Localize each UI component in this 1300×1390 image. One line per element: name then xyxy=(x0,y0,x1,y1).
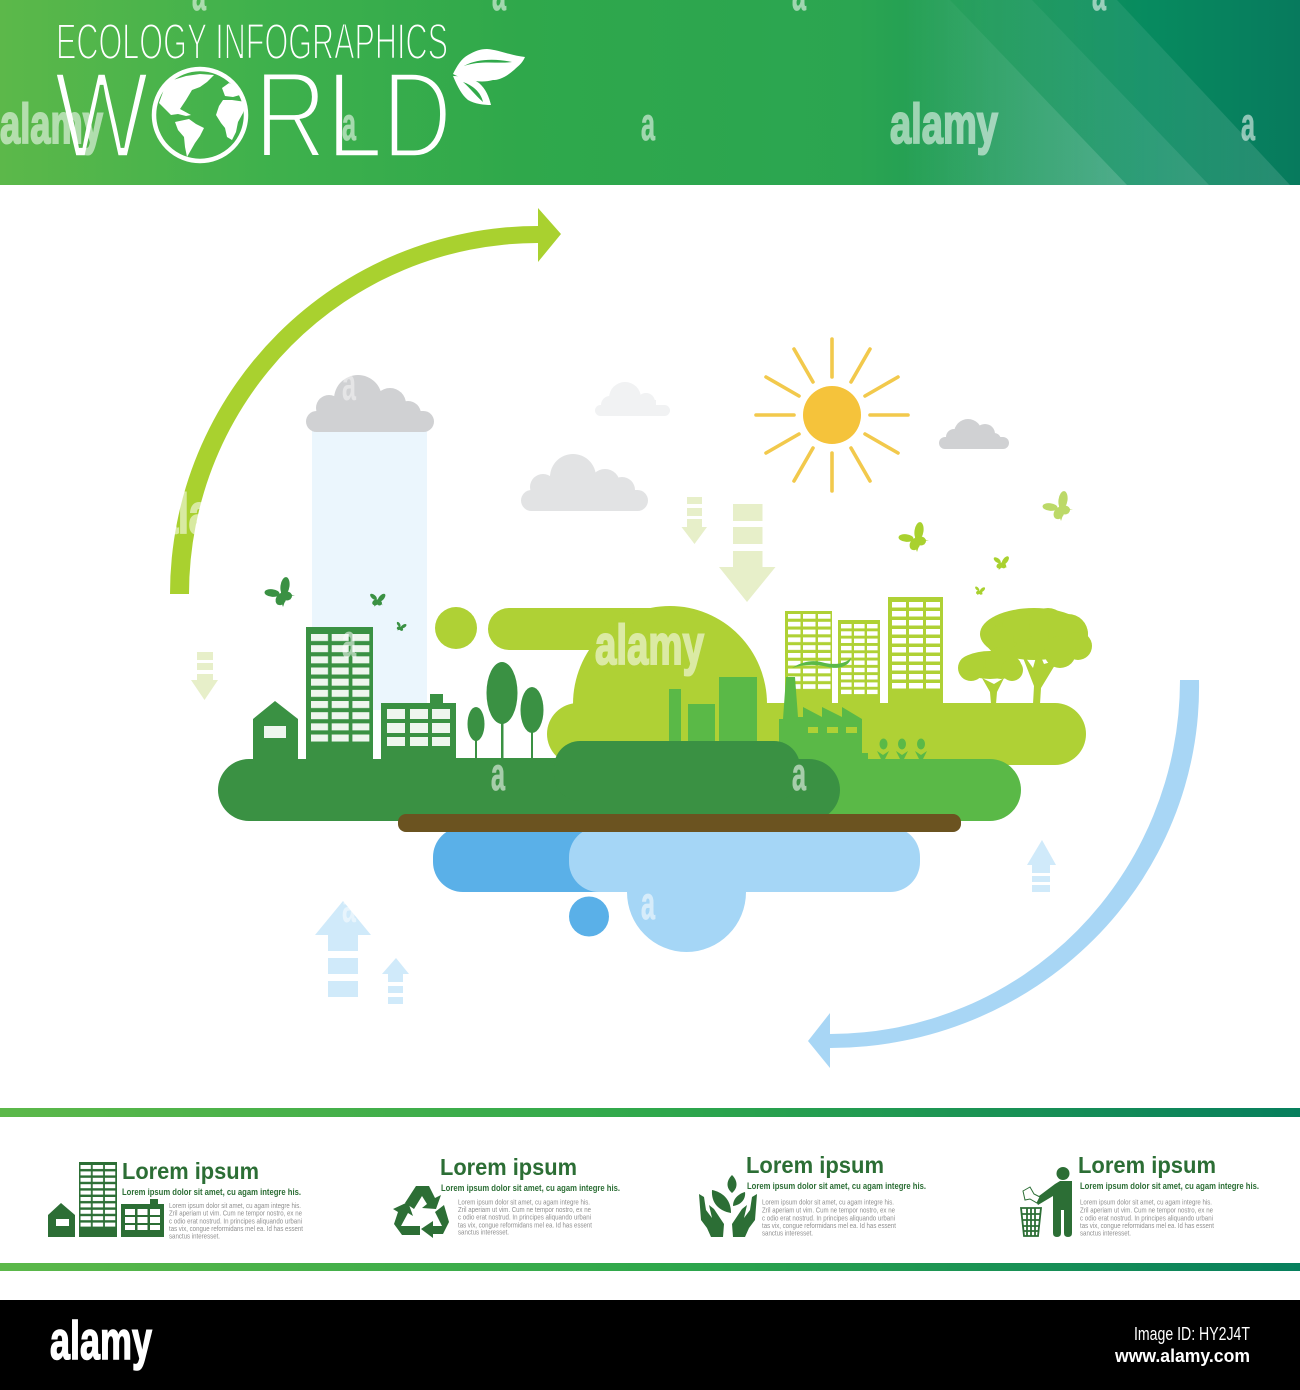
watermark: alamy right: alamy xyxy=(890,92,998,155)
subheading: Lorem ipsum dolor sit amet, cu agam integre his. xyxy=(441,1183,620,1194)
paragraph: Lorem ipsum dolor sit amet, cu agam integre his. xyxy=(458,1198,590,1206)
icon: large light cloud xyxy=(521,454,648,511)
heading: world: R xyxy=(254,48,327,184)
watermark: small marks: a xyxy=(1241,98,1255,150)
subheading: Lorem ipsum dolor sit amet, cu agam integre his. xyxy=(1080,1181,1259,1192)
arrow: left down arrow xyxy=(191,652,218,700)
paragraph: Lorem ipsum dolor sit amet, cu agam integre his. xyxy=(169,1201,301,1210)
centre buildings xyxy=(669,677,757,741)
subheading: Lorem ipsum dolor sit amet, cu agam integre his. xyxy=(747,1181,926,1192)
watermark: on up arrow: a xyxy=(342,880,356,932)
paragraph xyxy=(1080,1198,1214,1238)
icon: butterfly small green xyxy=(990,550,1013,573)
arrow: right up arrow xyxy=(1027,840,1056,892)
watermark: small marks: a xyxy=(641,877,655,929)
arrow: small sunlight arrow xyxy=(682,497,707,544)
heading: Lorem ipsum xyxy=(122,1158,259,1184)
watermark: on cloud: a xyxy=(342,358,356,410)
paragraph: Lorem ipsum dolor sit amet, cu agam integre his. xyxy=(762,1198,894,1206)
icon: leaves xyxy=(453,49,525,105)
icon: house xyxy=(253,701,298,759)
icon: butterfly xyxy=(365,587,389,610)
icon: globe xyxy=(154,69,246,161)
panel: ecological city island xyxy=(218,597,1092,952)
paragraph: sanctus interesset. xyxy=(762,1228,813,1238)
panel: header banner xyxy=(0,0,1300,185)
panel: item 1 buildings xyxy=(48,1158,303,1240)
panel: rain column and cloud xyxy=(306,358,434,710)
arrow: large sunlight arrow xyxy=(719,504,776,602)
mid green ground xyxy=(600,759,1021,821)
paragraph: tas vix, congue reformidans mel ea. Id has essent xyxy=(762,1221,896,1230)
paragraph: sanctus interesset. xyxy=(458,1228,509,1236)
watermark: small marks: a xyxy=(491,748,505,800)
water xyxy=(433,827,920,952)
paragraph xyxy=(169,1201,303,1240)
icon: butterfly large left xyxy=(264,576,295,607)
panel: footer bar xyxy=(0,1300,1300,1390)
paragraph: Zril aperiam ut vim. Cum ne tempor nostro, ex ne xyxy=(1080,1206,1213,1214)
paragraph: c odio erat nostrud. In principes aliquando urbani xyxy=(1080,1214,1213,1222)
icon: sun xyxy=(756,339,908,491)
icon: grey cloud right xyxy=(939,419,1009,449)
watermark: small marks: a xyxy=(641,98,655,150)
icon: butterfly tiny green xyxy=(972,582,987,598)
watermark: small marks: a xyxy=(792,748,806,800)
icon: recycle xyxy=(393,1186,449,1238)
paragraph xyxy=(458,1198,592,1236)
paragraph: Zril aperiam ut vim. Cum ne tempor nostro, ex ne xyxy=(458,1205,591,1214)
subheading: Lorem ipsum dolor sit amet, cu agam integre his. xyxy=(122,1187,301,1198)
paragraph: Zril aperiam ut vim. Cum ne tempor nostro, ex ne xyxy=(762,1206,895,1214)
icon: hands and leaves xyxy=(699,1175,757,1237)
watermark: on green arc: alamy xyxy=(157,482,265,545)
watermark: small marks: a xyxy=(342,615,356,667)
paragraph: sanctus interesset. xyxy=(1080,1228,1131,1238)
left skyline xyxy=(253,627,556,760)
heading: Lorem ipsum xyxy=(440,1154,577,1180)
heading: ecology infographics: ECOLOGY INFOGRAPHICS xyxy=(56,13,448,70)
arrow: green cycle arc xyxy=(170,208,561,594)
paragraph: tas vix, congue reformidans mel ea. Id has essent xyxy=(1080,1221,1214,1230)
light green terrain xyxy=(435,606,1086,802)
watermark: small marks xyxy=(342,615,806,929)
icon: pale cloud xyxy=(595,382,670,416)
paragraph: c odio erat nostrud. In principes aliquando urbani xyxy=(458,1212,591,1222)
tree: big acacia xyxy=(958,608,1092,704)
watermark: small marks xyxy=(192,0,1255,150)
website: www.alamy.com xyxy=(1114,1346,1250,1366)
factory xyxy=(779,658,868,760)
office block xyxy=(381,694,456,759)
divider: upper band xyxy=(0,1108,1300,1117)
trees xyxy=(456,662,556,760)
icon: buildings xyxy=(48,1162,164,1237)
heading: Lorem ipsum xyxy=(746,1152,884,1178)
panel: item 3 hands xyxy=(699,1152,926,1238)
image id: Image ID: HY2J4T xyxy=(1134,1324,1250,1344)
paragraph: tas vix, congue reformidans mel ea. Id has essent xyxy=(458,1220,592,1230)
tower xyxy=(306,627,373,759)
icon: butterfly pale xyxy=(1042,490,1073,521)
divider: lower band xyxy=(0,1263,1300,1271)
paragraph: Zril aperiam ut vim. Cum ne tempor nostro, ex ne xyxy=(169,1208,302,1218)
heading: world: W xyxy=(54,48,149,184)
heading: Lorem ipsum xyxy=(1078,1152,1216,1178)
panel: item 2 recycling xyxy=(393,1154,620,1238)
arrow: small up arrow xyxy=(382,958,409,1004)
panel: item 4 litter xyxy=(1021,1152,1259,1238)
arrow: blue cycle arc xyxy=(808,680,1199,1068)
arrow: big up arrow xyxy=(315,901,371,997)
icon: grey rain cloud xyxy=(306,375,434,432)
watermark: centre alamy: alamy xyxy=(595,613,704,676)
logo: alamy: alamy xyxy=(50,1311,152,1371)
icon: butterfly small xyxy=(393,618,409,634)
paragraph: sanctus interesset. xyxy=(169,1232,220,1240)
paragraph xyxy=(762,1198,896,1238)
paragraph: tas vix, congue reformidans mel ea. Id has essent xyxy=(169,1224,303,1233)
icon: butterfly green xyxy=(898,521,929,552)
flowers xyxy=(877,738,927,759)
paragraph: Lorem ipsum dolor sit amet, cu agam integre his. xyxy=(1080,1198,1212,1206)
soil xyxy=(398,814,961,832)
paragraph: c odio erat nostrud. In principes aliquando urbani xyxy=(169,1216,302,1226)
heading: world: L xyxy=(326,48,383,184)
dark green ground xyxy=(218,741,840,821)
heading: world xyxy=(54,48,452,184)
paragraph: c odio erat nostrud. In principes aliquando urbani xyxy=(762,1214,895,1222)
heading: world: D xyxy=(382,48,452,184)
watermark: small marks: a xyxy=(342,98,356,150)
right skyline xyxy=(785,597,943,704)
watermark: alamy left: alamy xyxy=(0,92,103,155)
icon: person with bin xyxy=(1021,1167,1072,1237)
